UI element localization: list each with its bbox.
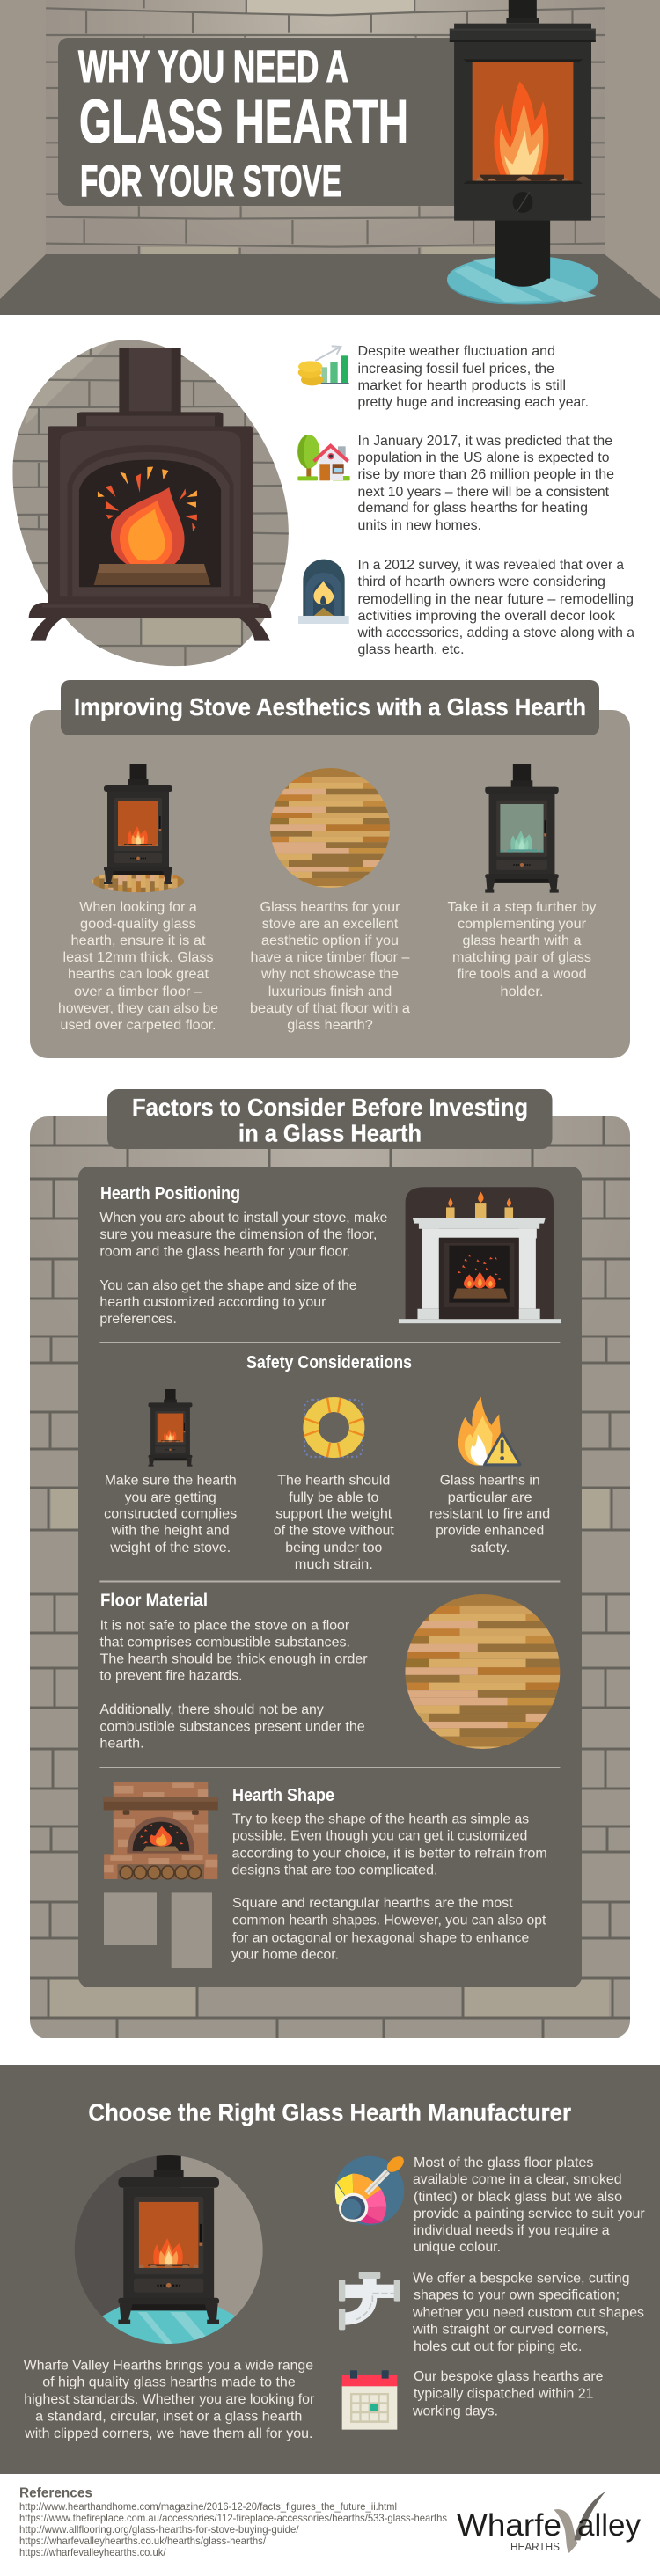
references: https://www.thefireplace.com.au/accessories/112-fireplace-accessories/hearths/533-glass-hearths xyxy=(19,2512,447,2524)
brick oval xyxy=(9,337,295,671)
text block: 2012 survey: third of hearth owners were considering xyxy=(357,574,605,589)
icon: colour palette and dropper xyxy=(335,2154,407,2225)
logo: Wharfe Valley Hearths: HEARTHS xyxy=(510,2540,560,2553)
column text: timber: beauty of that floor with a xyxy=(250,1001,410,1016)
column text: fire tools: holder. xyxy=(500,984,544,999)
text block: bespoke service: We offer a bespoke service, cutting xyxy=(413,2272,630,2287)
heading: factors to consider xyxy=(107,1089,553,1149)
safety column text: weight: support the weight xyxy=(275,1507,392,1522)
text block: US population: demand for glass hearths for heating xyxy=(357,501,588,516)
circular stove caption text xyxy=(24,2359,315,2441)
hearth positioning text: preferences. xyxy=(99,1312,177,1327)
icon: brick fireplace xyxy=(104,1782,218,1879)
column text: timber: Glass hearths for your xyxy=(260,900,400,915)
icon: calendar xyxy=(342,2370,397,2430)
subsection heading: safety considerations: Safety Considerations xyxy=(246,1353,412,1372)
panel: improving stove aesthetics xyxy=(30,680,630,1058)
stove on timber floor xyxy=(92,764,184,892)
divider xyxy=(99,1580,560,1582)
text block: market intro: increasing fossil fuel prices, the xyxy=(357,362,554,377)
subsection: floor material xyxy=(99,1592,368,1751)
text block: colours: provide a painting service to suit your xyxy=(414,2206,645,2221)
icon: flame with warning sign xyxy=(458,1397,520,1466)
floor material text: The hearth should be thick enough in order xyxy=(100,1651,368,1666)
text block: colours xyxy=(413,2155,645,2255)
logo: Wharfe Valley Hearths: alley xyxy=(577,2508,641,2543)
text block: 2012 survey xyxy=(357,558,634,657)
safety column text: construction: with the height and xyxy=(111,1524,230,1539)
text block: 2012 survey: In a 2012 survey, it was revealed that over a xyxy=(357,558,624,573)
floor material text: It is not safe to place the stove on a floor xyxy=(100,1619,350,1633)
subsection: hearth positioning xyxy=(99,1184,387,1327)
circular stove caption text: a standard, circular, inset or a glass hearth xyxy=(35,2410,302,2425)
inner panel xyxy=(78,1167,582,1987)
text block: bespoke service xyxy=(412,2272,644,2354)
subsection: floor material: Floor Material xyxy=(100,1592,208,1611)
column text: fire tools: complementing your xyxy=(458,917,587,932)
text block: dispatch time: Our bespoke glass hearths are xyxy=(414,2369,603,2384)
heading: improving stove aesthetics: Improving Stove Aesthetics with a Glass Hearth xyxy=(74,693,586,721)
hearth positioning text: sure you measure the dimension of the floor, xyxy=(99,1227,377,1242)
safety column text: fire resistance: particular are xyxy=(448,1490,532,1505)
icon: load ring xyxy=(303,1397,364,1458)
title box xyxy=(58,38,472,206)
circular stove caption text: Wharfe Valley Hearths brings you a wide range xyxy=(24,2359,313,2374)
references: http://www.hearthandhome.com/magazine/2016-12-20/facts_figures_the_future_ii.html xyxy=(19,2500,397,2513)
icon: coins and bar chart xyxy=(298,346,349,385)
hearth shape text: for an octagonal or hexagonal shape to enhance xyxy=(232,1930,529,1946)
timber floor circle xyxy=(405,1594,561,1750)
subsection: hearth positioning: Hearth Positioning xyxy=(100,1184,240,1204)
title text xyxy=(78,41,408,206)
fireplace in brick oval illustration xyxy=(9,337,295,671)
hearth positioning text: When you are about to install your stove, make xyxy=(99,1211,387,1226)
column text: fire tools xyxy=(447,900,597,999)
divider xyxy=(99,1342,560,1343)
logo: Wharfe Valley Hearths: Wharfe xyxy=(457,2508,561,2543)
column text: fire tools: matching pair of glass xyxy=(452,950,591,965)
text block: dispatch time: typically dispatched within 21 xyxy=(414,2386,593,2402)
text block: colours: (tinted) or black glass but we also xyxy=(414,2190,622,2205)
references xyxy=(19,2486,447,2558)
text block: 2012 survey: remodelling in the near future – remodelling xyxy=(357,592,634,607)
references: References xyxy=(19,2486,92,2501)
text block: 2012 survey: with accessories, adding a stove along with a xyxy=(357,626,634,640)
hero banner xyxy=(0,0,660,315)
hearth shape text: according to your choice, it is better to refrain from xyxy=(232,1846,547,1861)
column text: timber xyxy=(250,900,410,1033)
circular stove caption text: with clipped corners, we have them all for you. xyxy=(24,2426,312,2441)
references: http://www.allflooring.org/glass-hearths-for-stove-buying-guide/ xyxy=(19,2523,299,2536)
safety column text: fire resistance: resistant to fire and xyxy=(429,1507,550,1522)
floor material text: combustible substances present under the xyxy=(99,1719,365,1735)
text block: market intro: Despite weather fluctuation and xyxy=(357,344,555,359)
column text: timber: glass hearth? xyxy=(287,1018,373,1033)
safety column text: weight: of the stove without xyxy=(274,1524,394,1539)
safety column text: weight: being under too xyxy=(285,1540,382,1555)
references: https://wharfevalleyhearths.co.uk/hearths/glass-hearths/ xyxy=(19,2535,267,2547)
icon: arched fireplace xyxy=(298,560,349,624)
hearth positioning text: You can also get the shape and size of the xyxy=(99,1278,356,1293)
floor material text: Additionally, there should not be any xyxy=(99,1702,324,1717)
icon: pipe xyxy=(339,2272,400,2330)
safety column text: construction: constructed complies xyxy=(104,1507,237,1522)
text block: 2012 survey: activities improving the overall decor look xyxy=(357,609,616,624)
glass hearth plate xyxy=(447,255,598,304)
safety column text: weight: much strain. xyxy=(295,1557,373,1572)
icon: marble fireplace xyxy=(399,1187,561,1323)
hearth shape text: Try to keep the shape of the hearth as simple as xyxy=(232,1812,529,1826)
column text: thickness: used over carpeted floor. xyxy=(60,1018,216,1033)
logo: Wharfe Valley Hearths xyxy=(457,2492,641,2553)
column text: thickness: hearth, ensure it is at xyxy=(70,933,206,948)
text block: US population: next 10 years – there will be a consistent xyxy=(357,485,610,500)
column text: timber: aesthetic option if you xyxy=(261,933,399,948)
safety column text: weight: The hearth should xyxy=(277,1473,390,1489)
text block: market intro xyxy=(357,344,589,410)
rectangular hearth shape xyxy=(172,1892,212,1968)
text block: US population: In January 2017, it was predicted that the xyxy=(357,434,612,449)
text block: market intro: pretty huge and increasing each year. xyxy=(357,395,589,410)
cast iron stove xyxy=(29,348,272,641)
text block: colours: unique colour. xyxy=(414,2240,501,2255)
column text: thickness: good-quality glass xyxy=(80,917,196,932)
floor material text xyxy=(99,1619,368,1751)
safety column text: fire resistance xyxy=(429,1473,550,1555)
text block: colours: Most of the glass floor plates xyxy=(414,2155,593,2170)
hearth shape text: Square and rectangular hearths are the most xyxy=(232,1896,513,1911)
icon: house and tree xyxy=(297,435,350,480)
floor material text: to prevent fire hazards. xyxy=(99,1669,242,1684)
title text: FOR YOUR STOVE xyxy=(80,157,341,206)
stove flame and sparks xyxy=(94,467,210,585)
text block: 2012 survey: glass hearth, etc. xyxy=(357,642,465,657)
hearth shape text: possible. Even though you can get it customized xyxy=(232,1828,527,1843)
hearth positioning text: hearth customized according to your xyxy=(99,1295,326,1310)
safety column text: fire resistance: safety. xyxy=(470,1540,510,1555)
text block: colours: available come in a clear, smoked xyxy=(413,2172,621,2187)
hearth shape text: common hearth shapes. However, you can also opt xyxy=(232,1913,546,1928)
heading: improving stove aesthetics xyxy=(61,680,599,735)
text block: US population: rise by more than 26 million people in the xyxy=(357,467,614,482)
text block: US population: units in new homes. xyxy=(357,518,481,533)
subsection: hearth shape: Hearth Shape xyxy=(232,1786,334,1805)
text block: market intro: market for hearth products is still xyxy=(357,378,566,393)
floor material text: that comprises combustible substances. xyxy=(99,1635,350,1650)
floor material text: hearth. xyxy=(99,1736,144,1751)
heading: choose the right manufacturer: Choose the Right Glass Hearth Manufacturer xyxy=(88,2099,571,2126)
timber floor circle xyxy=(270,768,391,889)
column text: fire tools: fire tools and a wood xyxy=(458,967,586,982)
column text: fire tools: glass hearth with a xyxy=(463,933,582,948)
icon: small stove xyxy=(149,1389,192,1467)
stove with tinted glass xyxy=(485,764,559,893)
heading: factors to consider: Factors to Consider Before Investing xyxy=(132,1094,528,1121)
text block: dispatch time: working days. xyxy=(412,2404,498,2419)
column text: timber: stove are an excellent xyxy=(262,917,399,932)
safety column text: construction: you are getting xyxy=(125,1490,216,1505)
circular stove caption text: of high quality glass hearths made to the xyxy=(42,2375,296,2390)
references: https://wharfevalleyhearths.co.uk/ xyxy=(19,2546,166,2558)
safety column text: construction: weight of the stove. xyxy=(109,1540,231,1555)
safety column text: construction: Make sure the hearth xyxy=(105,1473,237,1489)
hearth positioning text xyxy=(99,1211,387,1327)
column text: thickness: When looking for a xyxy=(79,900,197,915)
divider xyxy=(99,1767,560,1768)
text block: US population xyxy=(357,434,614,533)
circular stove scene xyxy=(74,2147,264,2349)
column text: thickness xyxy=(58,900,218,1033)
heading: factors to consider: in a Glass Hearth xyxy=(238,1119,422,1147)
text block: colours: individual needs if you require a xyxy=(414,2223,610,2238)
title text: GLASS HEARTH xyxy=(79,87,408,156)
text block: bespoke service: whether you need custom cut shapes xyxy=(412,2306,644,2321)
column text: thickness: over a timber floor – xyxy=(74,984,202,999)
hero stove with flame xyxy=(450,0,596,287)
column text: thickness: however, they can also be xyxy=(58,1001,218,1016)
title text: WHY YOU NEED A xyxy=(78,41,348,91)
hearth shape text: designs that are too complicated. xyxy=(232,1862,437,1877)
safety column text: weight: fully be able to xyxy=(289,1490,378,1505)
column text: thickness: hearths can look great xyxy=(68,967,209,982)
safety column text: construction xyxy=(104,1473,237,1555)
circular stove caption text: highest standards. Whether you are looking for xyxy=(24,2392,315,2407)
column text: timber: have a nice timber floor – xyxy=(250,950,410,965)
safety column text: weight xyxy=(274,1473,394,1572)
hearth positioning text: room and the glass hearth for your floor. xyxy=(99,1244,350,1260)
text block: bespoke service: with straight or curved corners, xyxy=(412,2323,609,2338)
panel: factors to consider xyxy=(30,1089,630,2038)
column text: thickness: least 12mm thick. Glass xyxy=(63,950,213,965)
panel: choose the right manufacturer xyxy=(0,2065,660,2474)
text block: bespoke service: shapes to your own specification; xyxy=(414,2288,620,2303)
safety column text: fire resistance: provide enhanced xyxy=(436,1524,544,1539)
hearth shape text xyxy=(231,1812,547,1962)
text block: US population: population in the US alone is expected to xyxy=(357,450,610,465)
brick wall background xyxy=(30,1116,630,2038)
safety column text: fire resistance: Glass hearths in xyxy=(440,1473,540,1489)
brick back wall xyxy=(46,0,605,255)
square hearth shape xyxy=(104,1892,157,1945)
column text: fire tools: Take it a step further by xyxy=(447,900,597,915)
column text: timber: luxurious finish and xyxy=(268,984,392,999)
floor xyxy=(0,254,660,315)
column text: timber: why not showcase the xyxy=(260,967,399,982)
text block: bespoke service: holes cut out for piping etc. xyxy=(414,2339,583,2354)
text block: dispatch time xyxy=(412,2369,603,2419)
subsection: hearth shape xyxy=(231,1786,547,1962)
hearth shape text: your home decor. xyxy=(231,1947,339,1962)
